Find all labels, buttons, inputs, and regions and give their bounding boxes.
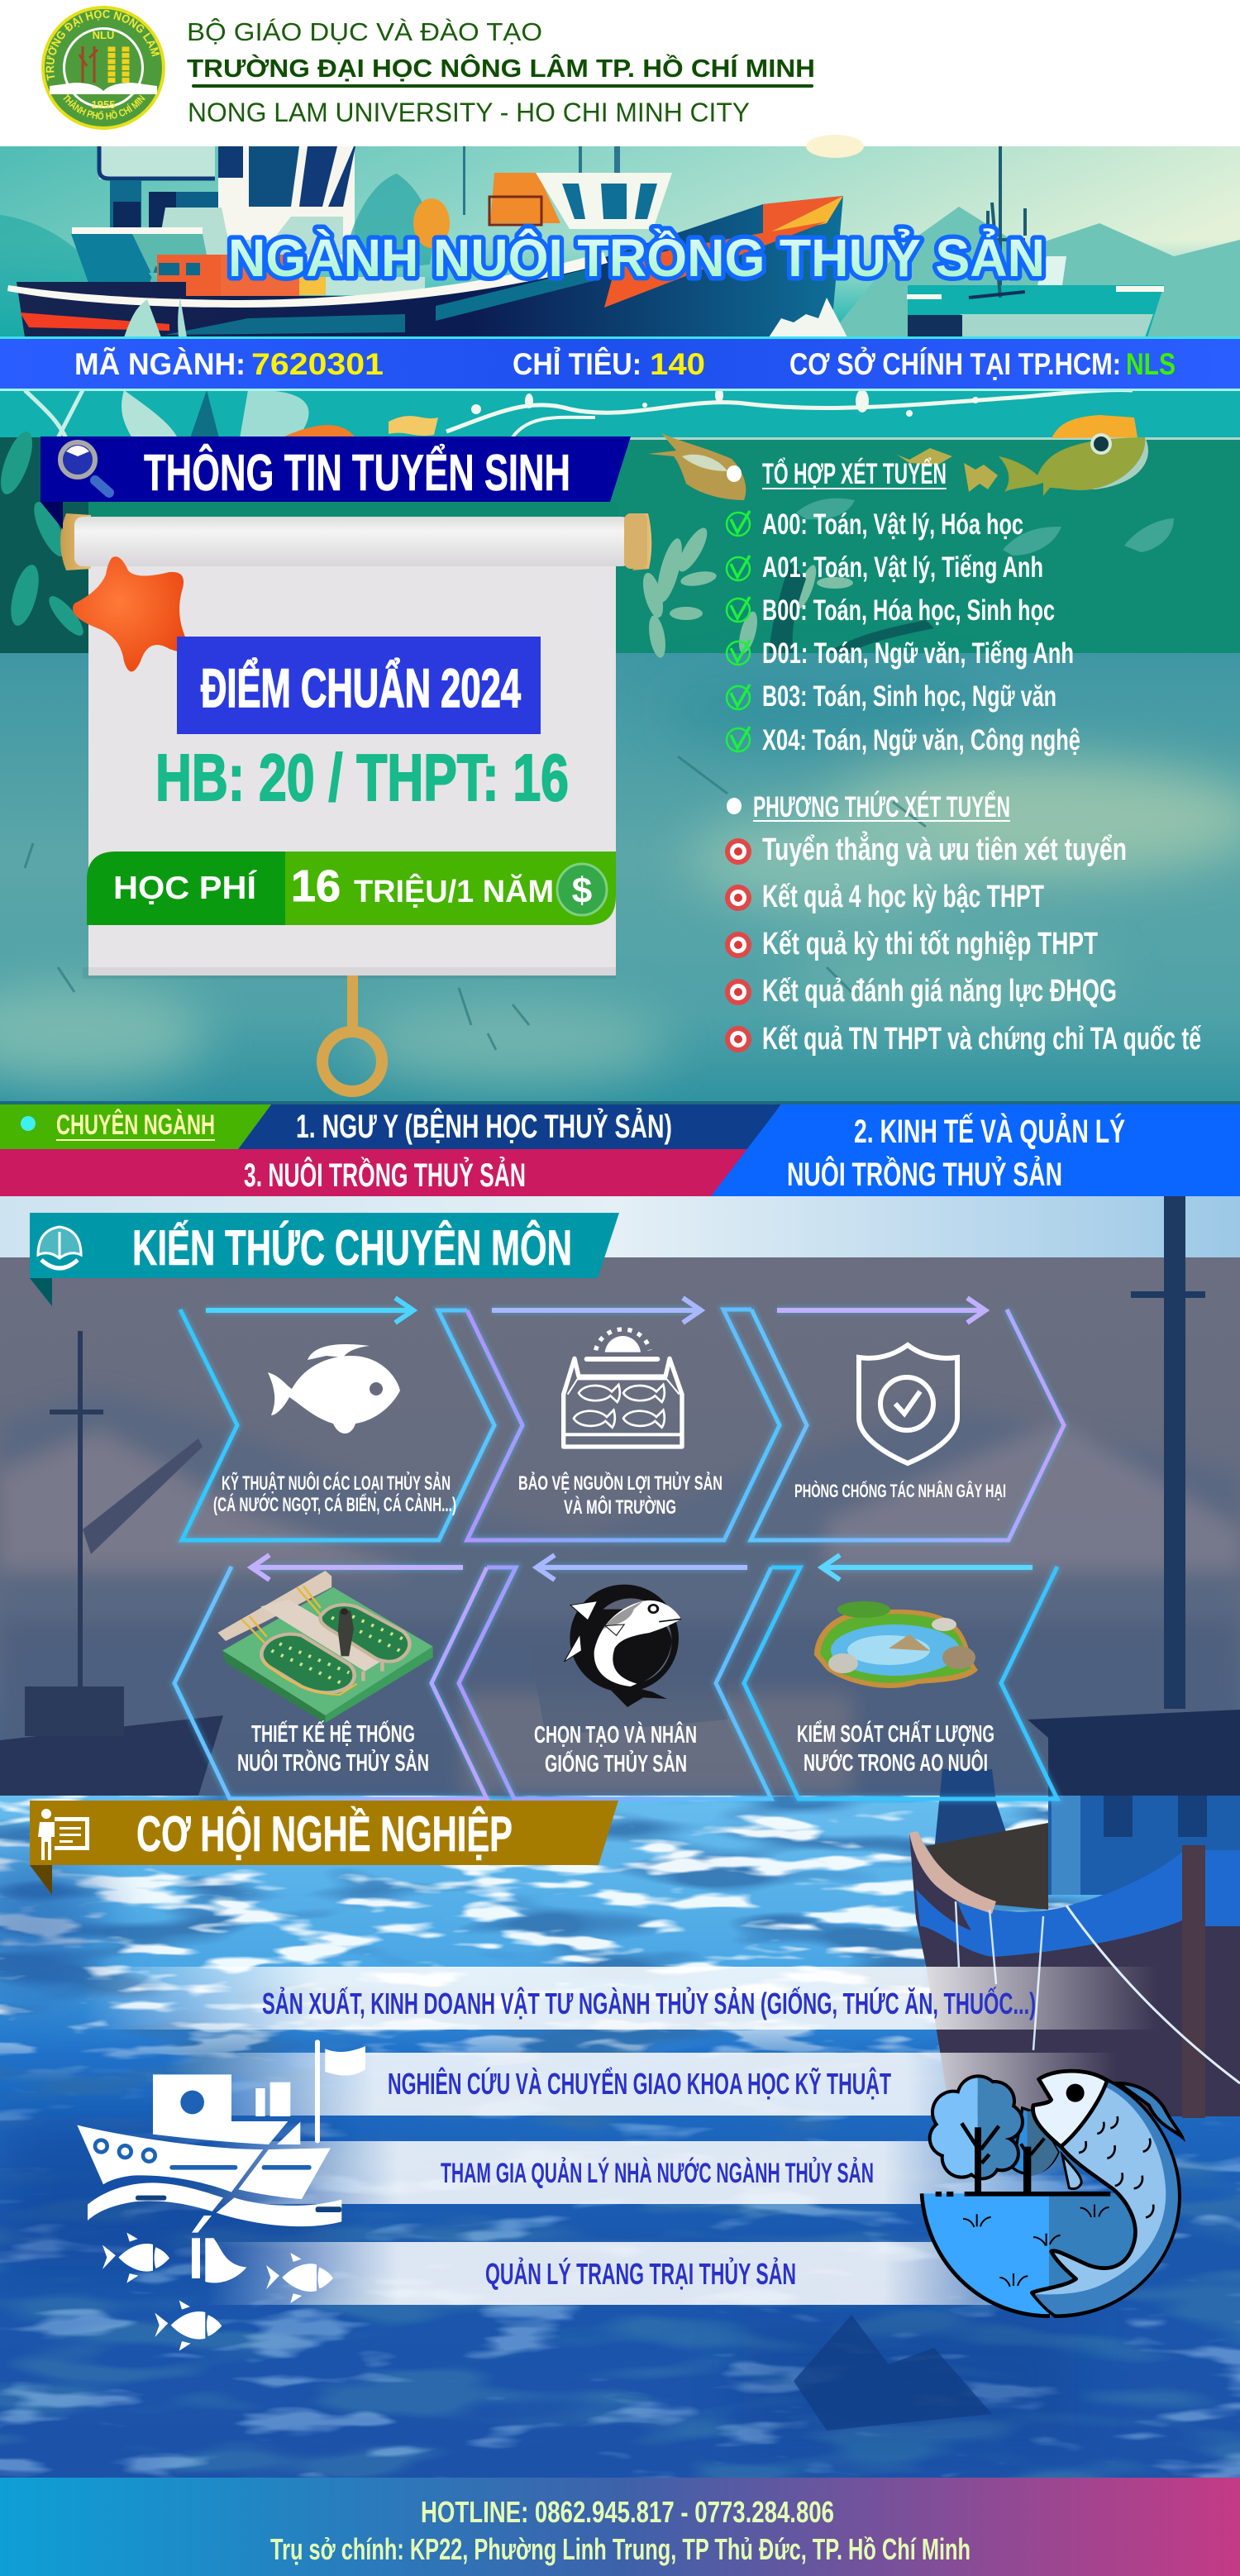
combination A00: A00: Toán, Vật lý, Hóa học	[762, 508, 1023, 541]
specialisation 3: 3. NUÔI TRỒNG THUỶ SẢN	[244, 1156, 526, 1194]
banner illustration: fishing boats	[0, 135, 1240, 339]
combination A00	[727, 508, 1023, 541]
specialisation 1	[238, 1104, 781, 1149]
section background: ocean	[0, 1769, 1240, 2478]
leaves beside scroll	[0, 428, 934, 659]
specialisation 2: 2. KINH TẾ VÀ QUẢN LÝ	[854, 1112, 1125, 1150]
flow chart: knowledge areas	[174, 1298, 1064, 1799]
arrow	[822, 1555, 1033, 1580]
address: Trụ sở chính: KP22, Phường Linh Trung, TP Thủ Đức, TP. Hồ Chí Minh	[270, 2532, 971, 2566]
quota: CHỈ TIÊU:	[513, 346, 641, 381]
left fishing boat	[0, 1331, 223, 1796]
logo: Nong Lam University seal	[41, 6, 165, 130]
arrow	[206, 1298, 413, 1323]
campus: CƠ SỞ CHÍNH TẠI TP.HCM:	[789, 346, 1121, 381]
arrow	[492, 1298, 701, 1323]
combination A01: A01: Toán, Vật lý, Tiếng Anh	[762, 551, 1043, 584]
seaweed and forward cargo	[343, 146, 672, 273]
tuition bar: TRIỆU/1 NĂM	[354, 873, 554, 909]
tuition bar: HỌC PHÍ	[113, 870, 257, 906]
combination A01	[727, 551, 1043, 584]
step: pest prevention	[751, 1298, 1064, 1540]
birds	[25, 756, 926, 1050]
step: system design: NUÔI TRỒNG THỦY SẢN	[237, 1748, 429, 1777]
stats band: programme code, quota, campus	[0, 336, 1240, 391]
career 2: NGHIÊN CỨU VÀ CHUYỂN GIAO KHOA HỌC KỸ THUẬT	[388, 2066, 891, 2101]
fish: large yellow-green	[999, 415, 1148, 496]
method 2	[725, 880, 1044, 914]
scroll paper	[88, 562, 616, 976]
heading: career opportunities: CƠ HỘI NGHỀ NGHIỆP	[136, 1806, 513, 1862]
combination B00: B00: Toán, Hóa học, Sinh học	[762, 594, 1055, 627]
icon: magnifier	[60, 442, 109, 493]
panel: admissions scroll	[60, 513, 651, 1091]
logo: Nong Lam University seal: NLU	[93, 29, 114, 41]
methods heading: PHƯƠNG THỨC XÉT TUYỂN	[753, 790, 1010, 823]
combinations heading: TỔ HỢP XÉT TUYỂN	[762, 457, 947, 490]
stats band: programme code, quota, campus: NLS	[1126, 347, 1176, 381]
step: fish farming techniques	[180, 1298, 494, 1540]
icon: shield check	[859, 1345, 957, 1463]
programme code: MÃ NGÀNH:	[74, 346, 246, 381]
section backgrounds: sky, harbour	[0, 1196, 1240, 1796]
arrow	[777, 1298, 985, 1323]
panel: admission methods	[725, 790, 1202, 1057]
rocks in water	[794, 2315, 992, 2431]
specialisation 1: 1. NGƯ Y (BỆNH HỌC THUỶ SẢN)	[296, 1107, 672, 1145]
step: fish farming techniques: (CÁ NƯỚC NGỌT, CÁ BIỂN, CÁ CẢNH...)	[213, 1492, 456, 1516]
career 4: QUẢN LÝ TRANG TRẠI THỦY SẢN	[485, 2256, 796, 2291]
second tree	[1011, 2108, 1058, 2193]
combination B00	[727, 594, 1055, 627]
boat at harbour	[909, 1769, 1240, 2118]
university english name: NONG LAM UNIVERSITY - HO CHI MINH CITY	[188, 98, 750, 127]
career list	[83, 1967, 1157, 2305]
career 4	[207, 2242, 1075, 2305]
combination D01	[727, 637, 1074, 670]
heading: specialist knowledge: KIẾN THỨC CHUYÊN MÔN	[132, 1220, 572, 1276]
combinations heading	[727, 457, 947, 490]
combination X04	[727, 724, 1080, 756]
icon: jumping tuna	[564, 1585, 681, 1707]
heading: specialist knowledge	[30, 1213, 619, 1306]
specialisation label: CHUYÊN NGÀNH	[56, 1109, 215, 1141]
method 1	[725, 830, 1127, 867]
arrow	[537, 1555, 747, 1580]
step: resource protection: VÀ MÔI TRƯỜNG	[564, 1496, 676, 1519]
sea plants and turtle in teal strip	[25, 388, 1133, 438]
step: breeding and selection	[459, 1555, 771, 1799]
fish body	[1032, 2071, 1182, 2316]
tuition bar	[87, 852, 616, 925]
right fishing boat cabin and mast	[1028, 1196, 1240, 1796]
scroll roller	[60, 513, 651, 570]
stats band: programme code, quota, campus: 140	[650, 347, 705, 381]
step: fish farming techniques: KỸ THUẬT NUÔI CÁC LOẠI THỦY SẢN	[222, 1471, 451, 1495]
university name: TRƯỜNG ĐẠI HỌC NÔNG LÂM TP. HỒ CHÍ MINH	[187, 53, 815, 83]
career 3: THAM GIA QUẢN LÝ NHÀ NƯỚC NGÀNH THỦY SẢN	[441, 2158, 874, 2189]
icon: dollar coin: $	[572, 871, 592, 911]
step: resource protection	[467, 1298, 780, 1540]
hull with orange bow	[7, 196, 847, 337]
step: pest prevention: PHÒNG CHỐNG TÁC NHÂN GÂY HẠI	[794, 1480, 1006, 1501]
ministry name: BỘ GIÁO DỤC VÀ ĐÀO TẠO	[187, 17, 542, 46]
logo: Nong Lam University seal: 1955	[92, 98, 115, 111]
step: system design: THIẾT KẾ HỆ THỐNG	[251, 1720, 415, 1748]
main title: NGÀNH NUÔI TRỒNG THUỶ SẢN	[228, 227, 1045, 288]
method 2: Kết quả 4 học kỳ bậc THPT	[762, 880, 1044, 914]
method 1: Tuyển thẳng và ưu tiên xét tuyển	[762, 830, 1127, 867]
step: breeding and selection: GIỐNG THỦY SẢN	[545, 1749, 687, 1777]
header: university identity	[41, 6, 815, 130]
footer: contact	[0, 2478, 1240, 2576]
harbour hills	[0, 1389, 1240, 1796]
icon: isometric tanks	[217, 1571, 433, 1723]
icon: dollar coin	[557, 864, 607, 915]
star badge	[73, 556, 188, 671]
specialisation 2	[711, 1104, 1240, 1196]
central boat silhouette	[529, 1637, 727, 1736]
arrow	[251, 1555, 463, 1580]
career 3	[207, 2141, 1075, 2204]
career 2	[165, 2053, 1116, 2116]
method 4	[725, 974, 1117, 1009]
step: resource protection: BẢO VỆ NGUỒN LỢI THỦY SẢN	[518, 1471, 723, 1495]
specialisations bar	[0, 1101, 1240, 1196]
step: system design	[174, 1555, 487, 1799]
icon: pond	[814, 1601, 978, 1688]
step: water quality control	[744, 1555, 1057, 1799]
first tree	[928, 2074, 1024, 2193]
step: breeding and selection: CHỌN TẠO VÀ NHÂN	[534, 1720, 697, 1748]
step: water quality control: NƯỚC TRONG AO NUÔI	[804, 1748, 988, 1777]
stats band: programme code, quota, campus: 7620301	[251, 347, 384, 381]
method 3	[725, 927, 1098, 961]
fish: small striped	[648, 433, 1174, 556]
clouds	[0, 678, 1240, 1083]
heading: admissions info: THÔNG TIN TUYỂN SINH	[144, 445, 570, 502]
specialisation 3	[0, 1149, 748, 1196]
icon: open book emblem	[38, 1227, 81, 1268]
combination B03: B03: Toán, Sinh học, Ngữ văn	[762, 680, 1056, 713]
second boat	[907, 146, 1164, 337]
methods heading	[727, 790, 1010, 823]
admissions background: aquatic illustration	[0, 388, 1240, 1104]
specialisation 2: NUÔI TRỒNG THUỶ SẢN	[787, 1155, 1062, 1193]
icon: fish and tree circular badge	[922, 2071, 1182, 2316]
panel: subject combinations	[727, 457, 1080, 756]
flow glow	[174, 1309, 1064, 1799]
logo: Nong Lam University seal: TRƯỜNG ĐẠI HỌC NÔNG LÂM	[46, 10, 160, 81]
specialisation label	[0, 1104, 271, 1149]
main boat superstructure	[71, 146, 425, 296]
hotline: HOTLINE: 0862.945.817 - 0773.284.806	[421, 2495, 834, 2529]
icon: presenter	[38, 1809, 89, 1860]
step: water quality control: KIỂM SOÁT CHẤT LƯỢNG	[797, 1720, 994, 1748]
icon: fish tray under sun	[564, 1329, 682, 1447]
cutoff score heading: ĐIỂM CHUẨN 2024	[201, 657, 521, 718]
tuition bar: 16	[291, 861, 341, 911]
heading: career opportunities	[30, 1801, 618, 1895]
cutoff score heading	[177, 637, 541, 734]
career 1	[83, 1967, 1157, 2030]
icon: fish	[268, 1344, 400, 1433]
method 3: Kết quả kỳ thi tốt nghiệp THPT	[762, 927, 1098, 961]
heading: admissions info	[41, 436, 631, 529]
combination D01: D01: Toán, Ngữ văn, Tiếng Anh	[762, 637, 1074, 670]
cutoff scores: HB: 20 / THPT: 16	[155, 741, 569, 814]
icon: white fishing boat with fish	[77, 2039, 365, 2351]
combination B03	[727, 680, 1056, 713]
combination X04: X04: Toán, Ngữ văn, Công nghệ	[762, 724, 1080, 756]
pull ring	[322, 976, 382, 1091]
